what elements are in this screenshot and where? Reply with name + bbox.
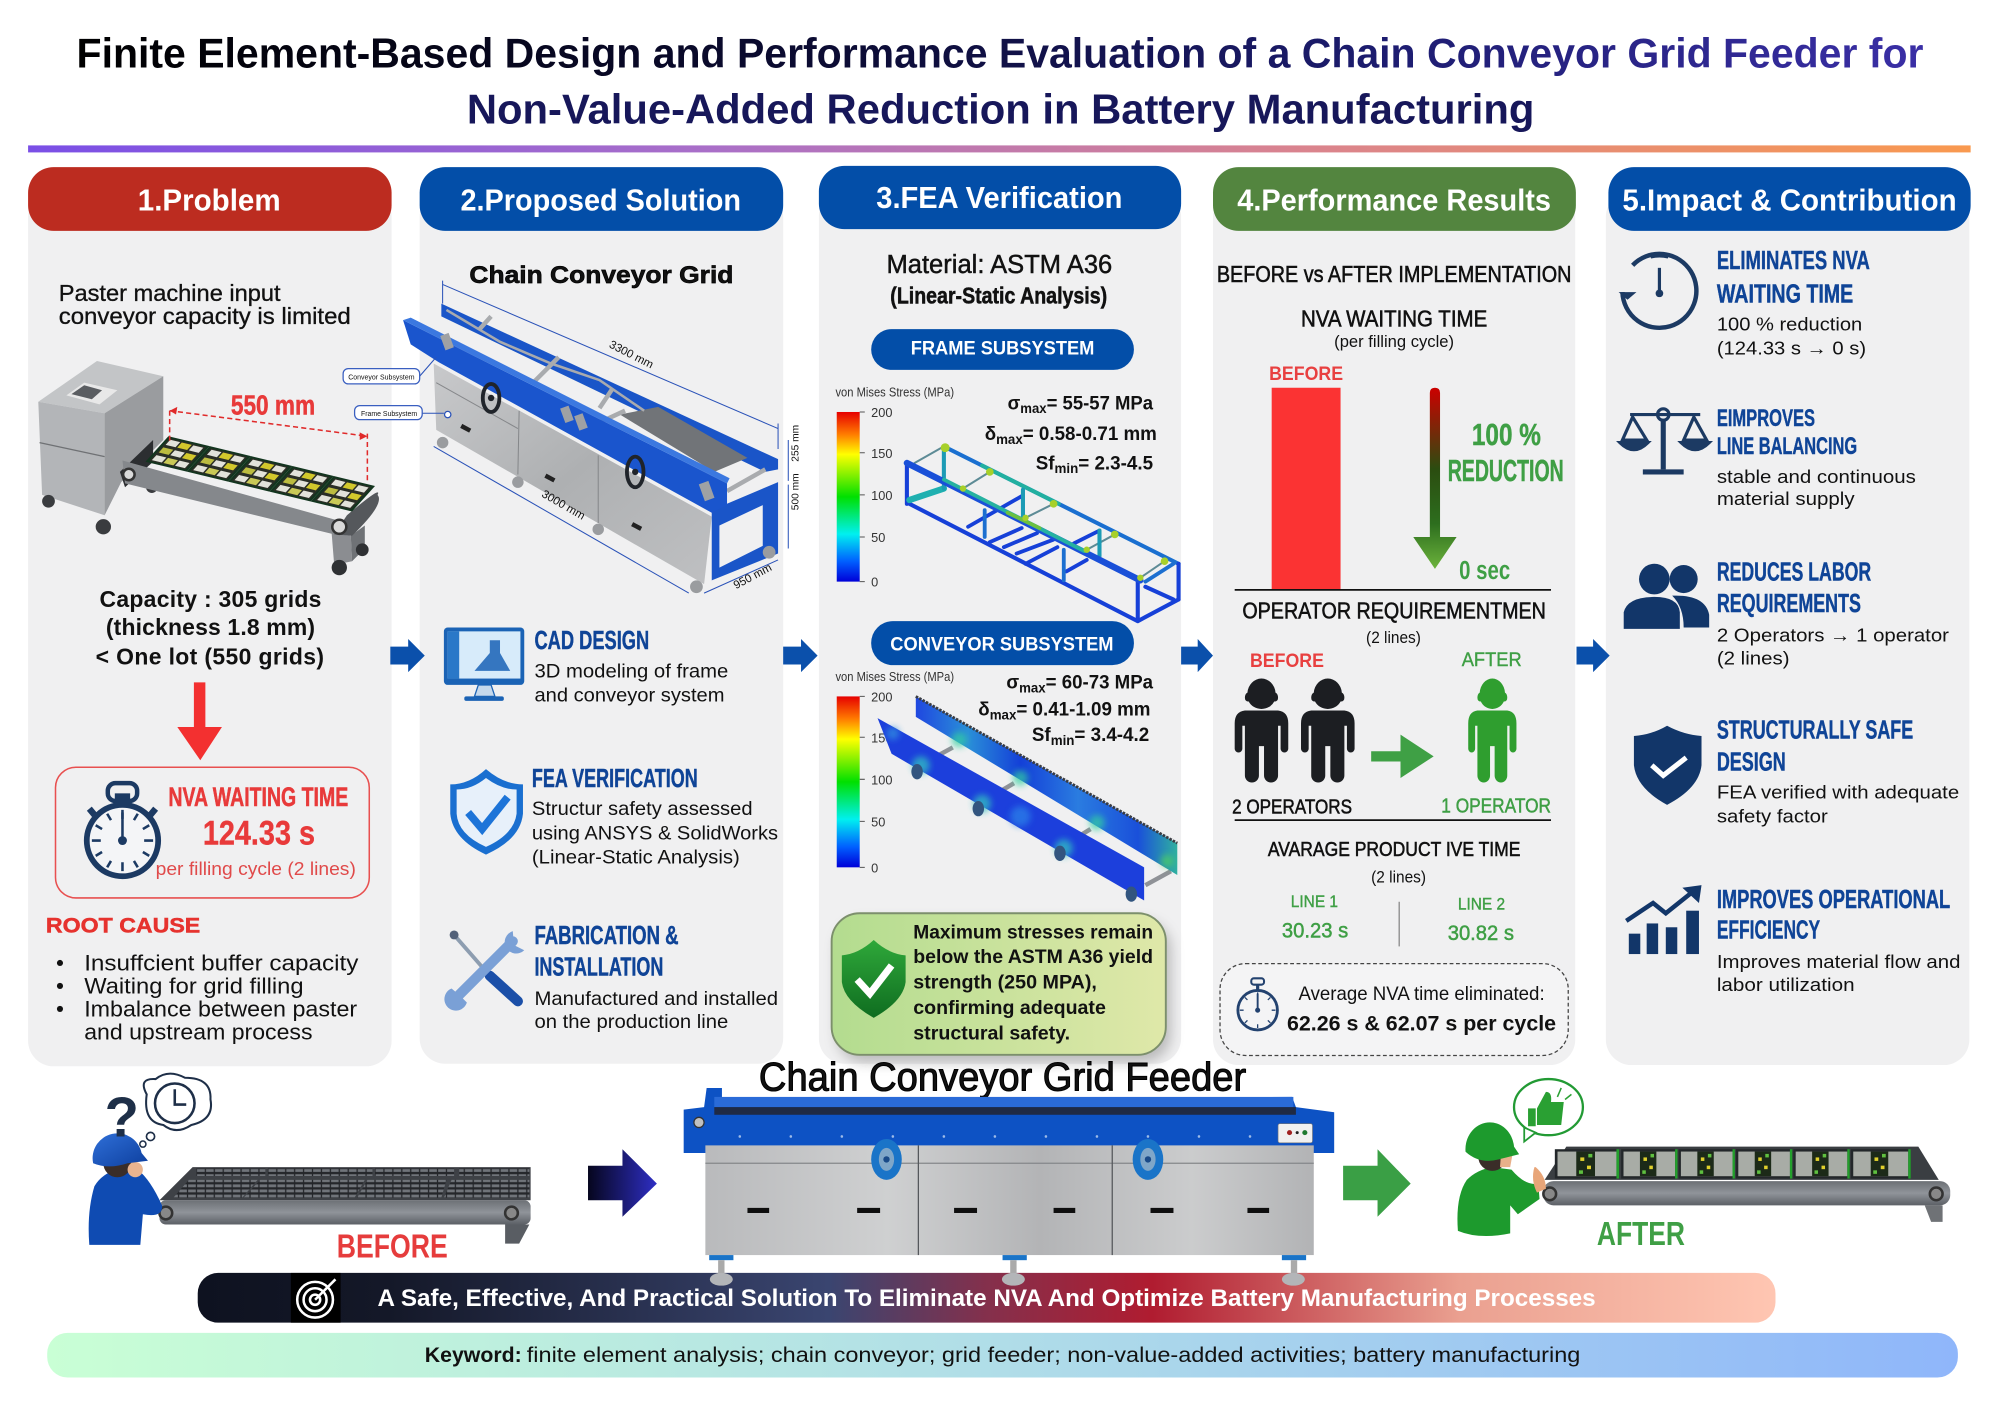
- heading: operator requirement: OPERATOR REQUIREMENTMEN: [1242, 598, 1546, 624]
- callout: NVA waiting time: [56, 767, 369, 898]
- illustration: after conveyor: [1543, 1147, 1950, 1222]
- item: fabrication and installation: FABRICATION &: [534, 922, 679, 950]
- header: FEA verification: [819, 166, 1181, 229]
- callout: structural safety: below the ASTM A36 yield: [913, 946, 1153, 968]
- heading: NVA waiting time: (per filling cycle): [1334, 332, 1454, 351]
- text: material: (Linear-Static Analysis): [890, 283, 1107, 309]
- item: fabrication and installation: Manufactured and installed: [534, 989, 778, 1010]
- stats: conveyor: max: [1019, 680, 1046, 696]
- item: improves line balancing: [1620, 405, 1916, 509]
- text: capacity limited: conveyor capacity is limited: [59, 303, 351, 329]
- stats: frame: [985, 392, 1157, 476]
- arrow: green: [1343, 1149, 1411, 1217]
- text: 100 percent reduction: [1448, 418, 1564, 585]
- panel: performance results: [1213, 167, 1576, 1065]
- item: eliminates NVA waiting time: (124.33 s → 0 s): [1717, 338, 1866, 359]
- pill: frame subsystem: [871, 329, 1134, 370]
- dimension: 550 mm: 550 mm: [231, 390, 315, 421]
- color legend: von Mises conveyor: [835, 669, 954, 875]
- banner: solution statement background: [198, 1273, 1775, 1323]
- heading: average productive time: [1268, 839, 1520, 887]
- stats: line times: LINE 2: [1458, 894, 1505, 913]
- text: capacity: < One lot (550 grids): [96, 644, 324, 670]
- arrow: verification to results: [1181, 639, 1213, 672]
- FEA model: conveyor plates: [878, 696, 1177, 902]
- stats: frame: = 2.3-4.5: [1078, 452, 1153, 474]
- arrow: green operators: [1371, 735, 1434, 778]
- callout: frame subsystem: Frame Subsystem: [361, 409, 417, 418]
- keyword bar: Keyword:: [425, 1342, 522, 1367]
- stats: frame: min: [1055, 460, 1078, 476]
- arrow: results to impact: [1577, 639, 1610, 672]
- arrow: reduction: [1413, 388, 1457, 569]
- heading: NVA waiting time: [1301, 306, 1487, 351]
- group: operators after: 1 OPERATOR: [1441, 795, 1551, 817]
- icon: small stopwatch: [1238, 978, 1277, 1030]
- illustration: chain conveyor grid feeder: [684, 1088, 1334, 1255]
- text: material: Material: ASTM A36: [886, 251, 1112, 279]
- illustration: before conveyor: [159, 1167, 531, 1244]
- illustration: chain conveyor CAD model with dimensions: 950 mm: [732, 562, 774, 592]
- icon: crossed tools: [444, 930, 524, 1011]
- item: FEA verification: Structur safety assessed: [532, 799, 753, 820]
- item: CAD design: CAD DESIGN: [534, 627, 649, 655]
- group: operators before: 2 OPERATORS: [1232, 797, 1352, 819]
- item: eliminates NVA waiting time: WAITING TIME: [1717, 280, 1853, 308]
- arrow: red down: [177, 682, 222, 760]
- color legend: von Mises conveyor: von Mises Stress (MPa): [835, 669, 954, 684]
- color legend: von Mises frame: [835, 385, 954, 590]
- item: reduces labor requirements: 2 Operators → 1 operator: [1717, 625, 1949, 646]
- item: eliminates NVA waiting time: [1619, 247, 1870, 359]
- stats: conveyor: δ: [978, 699, 990, 721]
- callout: conveyor subsystem: Conveyor Subsystem: [348, 372, 415, 381]
- header: performance results: 4.Performance Results: [1237, 183, 1551, 217]
- root cause list: Imbalance between paster: [84, 997, 358, 1022]
- group: operators after: AFTER: [1462, 649, 1522, 671]
- stats: frame: δ: [985, 423, 997, 445]
- pill: conveyor subsystem: [871, 621, 1134, 665]
- item: improves operational efficiency: [1626, 885, 1960, 995]
- header: impact and contribution: [1608, 167, 1971, 231]
- illustration: chain conveyor CAD model with dimensions: 500 mm: [790, 473, 801, 510]
- heading: operator requirement: (2 lines): [1366, 628, 1421, 647]
- item: fabrication and installation: [444, 922, 778, 1033]
- item: CAD design: [444, 627, 728, 707]
- title: Non-Value-Added Reduction in Battery Manufacturing: [467, 86, 1534, 133]
- label: before: BEFORE: [337, 1229, 448, 1266]
- icon: thought bubble clock: [140, 1074, 211, 1147]
- illustration: paster machine with short conveyor: [38, 361, 379, 575]
- color legend: von Mises frame: 150: [871, 446, 892, 461]
- stats: line times: [1282, 892, 1514, 946]
- callout: structural safety: Maximum stresses remain: [913, 922, 1153, 944]
- dimension: 550 mm: [170, 390, 367, 482]
- text: capacity: Capacity : 305 grids: [100, 586, 321, 612]
- item: FEA verification: (Linear-Static Analysis): [532, 848, 740, 869]
- root cause list: [46, 912, 359, 1045]
- text: capacity: (thickness 1.8 mm): [106, 614, 315, 640]
- icon: shield check: [450, 769, 523, 855]
- arrow: solution to verification: [783, 639, 818, 672]
- callout: structural safety: [832, 913, 1171, 1062]
- header: FEA verification: 3.FEA Verification: [876, 181, 1122, 215]
- illustration: worker with question: ?: [105, 1085, 139, 1148]
- item: eliminates NVA waiting time: ELIMINATES NVA: [1717, 247, 1870, 275]
- callout: average NVA time eliminated: [1220, 964, 1568, 1055]
- item: structurally safe design: FEA verified with adequate: [1717, 781, 1959, 802]
- panel: impact and contribution: [1606, 167, 1971, 1065]
- item: improves line balancing: EIMPROVES: [1717, 405, 1815, 432]
- item: CAD design: and conveyor system: [534, 686, 724, 707]
- callout: NVA waiting time: 124.33 s: [203, 814, 315, 852]
- text: 100 percent reduction: 100 %: [1472, 418, 1541, 452]
- stats: conveyor: min: [1051, 732, 1074, 748]
- heading: NVA waiting time: NVA WAITING TIME: [1301, 306, 1487, 332]
- text: capacity limited: [59, 280, 351, 329]
- stats: conveyor: = 0.41-1.09 mm: [1016, 699, 1151, 721]
- FEA model: frame: [907, 443, 1179, 621]
- bar chart: NVA waiting time before: BEFORE: [1269, 364, 1343, 385]
- bar chart: NVA waiting time before: [1269, 364, 1343, 589]
- item: FEA verification: FEA VERIFICATION: [532, 765, 698, 793]
- color legend: von Mises frame: 200: [871, 405, 892, 420]
- title: Finite Element-Based Design and Performance Evaluation of a Chain Conveyor Grid Feeder for: [77, 30, 1923, 77]
- stats: conveyor: = 60-73 MPa: [1046, 672, 1154, 694]
- keyword bar: finite element analysis; chain conveyor; grid feeder; non-value-added activities; battery manufacturing: [527, 1342, 1580, 1367]
- icon: control box: [1278, 1124, 1312, 1143]
- item: improves operational efficiency: labor utilization: [1717, 974, 1855, 995]
- stats: frame: σ: [1008, 392, 1021, 414]
- icon: stopwatch: [87, 783, 158, 876]
- header: proposed solution: 2.Proposed Solution: [460, 183, 741, 217]
- stats: conveyor: Sf: [1032, 724, 1052, 746]
- stats: conveyor: [978, 672, 1154, 748]
- color legend: von Mises conveyor: 0: [871, 860, 878, 875]
- stats: line times: LINE 1: [1291, 892, 1338, 911]
- item: structurally safe design: STRUCTURALLY SAFE: [1717, 717, 1913, 745]
- feeder legs: [709, 1255, 1306, 1286]
- group: operators before: [1232, 651, 1355, 819]
- icon: target: [291, 1273, 341, 1323]
- callout: average NVA time eliminated: Average NVA time eliminated:: [1298, 984, 1545, 1005]
- illustration: chain conveyor CAD model with dimensions: 3000 mm: [539, 488, 587, 523]
- item: fabrication and installation: on the production line: [534, 1012, 728, 1033]
- stats: line times: 30.23 s: [1282, 917, 1348, 942]
- root cause list: and upstream process: [84, 1020, 313, 1045]
- header: impact and contribution: 5.Impact & Contribution: [1622, 183, 1957, 217]
- text: material: [886, 251, 1112, 309]
- group: operators after: [1441, 649, 1551, 817]
- heading: chain conveyor grid feeder: Chain Conveyor Grid Feeder: [759, 1056, 1246, 1100]
- callout: conveyor subsystem: [343, 357, 436, 384]
- arrow: dark blue: [588, 1149, 657, 1217]
- item: structurally safe design: safety factor: [1717, 806, 1828, 827]
- illustration: chain conveyor CAD model with dimensions: 255 mm: [790, 425, 801, 462]
- heading: before vs after: BEFORE vs AFTER IMPLEMENTATION: [1217, 261, 1571, 287]
- text: 100 percent reduction: 0 sec: [1459, 557, 1510, 585]
- item: reduces labor requirements: REQUIREMENTS: [1717, 590, 1861, 618]
- illustration: worker with thumbs up: [1457, 1079, 1583, 1236]
- icon: thumbs up speech bubble: [1514, 1079, 1583, 1142]
- stats: frame: = 0.58-0.71 mm: [1023, 423, 1157, 445]
- root cause list: Insuffcient buffer capacity: [84, 951, 359, 976]
- color legend: von Mises frame: 0: [871, 575, 878, 590]
- item: improves operational efficiency: Improves material flow and: [1717, 951, 1960, 972]
- root cause list: Waiting for grid filling: [84, 974, 304, 999]
- callout: frame subsystem: [355, 406, 451, 420]
- item: eliminates NVA waiting time: 100 % reduction: [1717, 313, 1862, 334]
- stats: frame: max: [996, 431, 1023, 447]
- stats: frame: max: [1020, 400, 1047, 416]
- color legend: von Mises frame: 50: [871, 530, 885, 545]
- color legend: von Mises frame: von Mises Stress (MPa): [835, 385, 954, 400]
- item: structurally safe design: DESIGN: [1717, 748, 1786, 776]
- callout: NVA waiting time: NVA WAITING TIME: [168, 782, 348, 812]
- callout: average NVA time eliminated: 62.26 s & 62.07 s per cycle: [1287, 1011, 1556, 1036]
- callout: NVA waiting time: per filling cycle (2 lines): [156, 858, 356, 879]
- banner: solution statement: [291, 1273, 1596, 1323]
- text: capacity: [96, 586, 324, 670]
- icon: navy shield: [1634, 726, 1702, 805]
- panel: proposed solution: [343, 167, 801, 1064]
- color legend: von Mises frame: 100: [871, 488, 892, 503]
- item: fabrication and installation: INSTALLATION: [534, 954, 663, 982]
- icon: monitor: [444, 628, 524, 701]
- item: FEA verification: using ANSYS & SolidWorks: [532, 823, 778, 844]
- arrow: problem to solution: [390, 639, 425, 672]
- header: problem: [28, 167, 392, 231]
- stats: frame: Sf: [1036, 452, 1055, 474]
- header: performance results: [1213, 167, 1576, 231]
- pill: conveyor subsystem: CONVEYOR SUBSYSTEM: [890, 633, 1114, 655]
- label: after: AFTER: [1597, 1216, 1685, 1253]
- icon: green shield: [842, 940, 906, 1018]
- heading: average productive time: AVARAGE PRODUCT IVE TIME: [1268, 839, 1520, 861]
- item: improves line balancing: material supply: [1717, 488, 1855, 509]
- stats: conveyor: max: [990, 706, 1017, 722]
- icon: growth chart: [1626, 885, 1702, 954]
- item: FEA verification: [450, 765, 778, 869]
- stats: conveyor: σ: [1006, 672, 1020, 694]
- illustration: chain conveyor CAD model with dimensions: 3300 mm: [607, 339, 655, 371]
- heading: average productive time: (2 lines): [1371, 868, 1426, 887]
- color legend: von Mises conveyor: 50: [871, 815, 885, 830]
- color legend: von Mises conveyor: 150: [871, 730, 892, 745]
- item: reduces labor requirements: (2 lines): [1717, 648, 1790, 669]
- callout: structural safety: strength (250 MPA),: [913, 971, 1097, 993]
- item: improves line balancing: stable and continuous: [1717, 466, 1916, 487]
- keyword bar: [47, 1333, 1958, 1378]
- color legend: von Mises conveyor: 100: [871, 772, 892, 787]
- icon: scales: [1620, 409, 1709, 472]
- illustration: chain conveyor CAD model with dimensions: [343, 281, 801, 593]
- stats: line times: 30.82 s: [1448, 920, 1514, 945]
- item: improves line balancing: LINE BALANCING: [1717, 433, 1857, 460]
- item: structurally safe design: [1634, 717, 1959, 827]
- root cause list: ROOT CAUSE: [46, 912, 200, 937]
- heading: chain conveyor grid: Chain Conveyor Grid: [469, 262, 733, 289]
- pill: frame subsystem: FRAME SUBSYSTEM: [911, 338, 1094, 360]
- header: proposed solution: [420, 167, 783, 231]
- heading: operator requirement: [1242, 598, 1546, 647]
- item: reduces labor requirements: [1624, 558, 1949, 669]
- icon: people: [1624, 564, 1709, 629]
- panel: problem: [28, 167, 392, 1066]
- item: improves operational efficiency: EFFICIENCY: [1717, 917, 1820, 945]
- stats: conveyor: = 3.4-4.2: [1074, 724, 1149, 746]
- text: capacity limited: Paster machine input: [59, 280, 281, 306]
- callout: structural safety: structural safety.: [913, 1023, 1070, 1045]
- panel: FEA verification: [819, 166, 1181, 1064]
- header: problem: 1.Problem: [138, 183, 281, 217]
- item: reduces labor requirements: REDUCES LABOR: [1717, 558, 1871, 586]
- illustration: worker with question: [89, 1074, 211, 1245]
- color legend: von Mises conveyor: 200: [871, 690, 892, 705]
- stats: frame: = 55-57 MPa: [1047, 392, 1154, 414]
- icon: clock: [1619, 254, 1696, 328]
- title: [77, 30, 1923, 133]
- banner: solution statement: A Safe, Effective, And Practical Solution To Eliminate NVA And Optimize Battery Manufacturing Processes: [378, 1285, 1596, 1311]
- callout: structural safety: confirming adequate: [913, 997, 1106, 1019]
- group: operators before: BEFORE: [1250, 651, 1324, 672]
- item: CAD design: 3D modeling of frame: [534, 661, 728, 682]
- text: 100 percent reduction: REDUCTION: [1448, 454, 1564, 488]
